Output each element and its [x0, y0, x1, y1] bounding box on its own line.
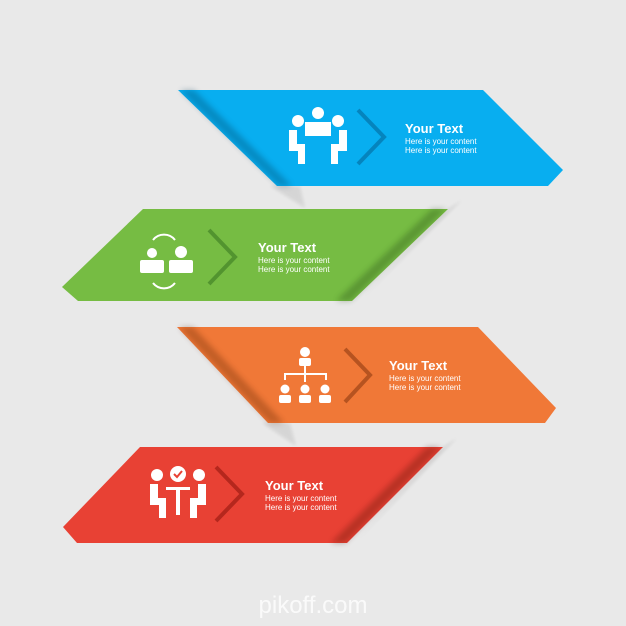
text block: Your Text [389, 358, 448, 373]
text block: Here is your content [258, 265, 330, 274]
text block: Here is your content [265, 494, 337, 503]
arrow [358, 110, 384, 164]
icon: agreement meeting [150, 466, 206, 518]
text block: Here is your content [265, 503, 337, 512]
watermark: pikoff.com [259, 592, 367, 619]
panel: orange [177, 327, 556, 423]
text block: Here is your content [258, 256, 330, 265]
text block [258, 240, 330, 274]
text block: Here is your content [389, 383, 461, 392]
text block [265, 478, 337, 512]
icon: org chart [279, 347, 331, 403]
text block: Your Text [265, 478, 324, 493]
arrow [209, 230, 235, 284]
panel: blue [178, 90, 563, 186]
background shadows [262, 186, 462, 543]
text block [389, 358, 461, 392]
icon: meeting people [289, 107, 347, 164]
panel: red [63, 447, 443, 543]
text block: Your Text [258, 240, 317, 255]
arrow [216, 467, 242, 521]
text block: Here is your content [389, 374, 461, 383]
arrow [345, 349, 370, 402]
text block [405, 121, 477, 155]
panel: green [62, 209, 448, 301]
text block: Here is your content [405, 146, 477, 155]
text block: Your Text [405, 121, 464, 136]
text block: Here is your content [405, 137, 477, 146]
icon: exchange people [140, 235, 193, 288]
